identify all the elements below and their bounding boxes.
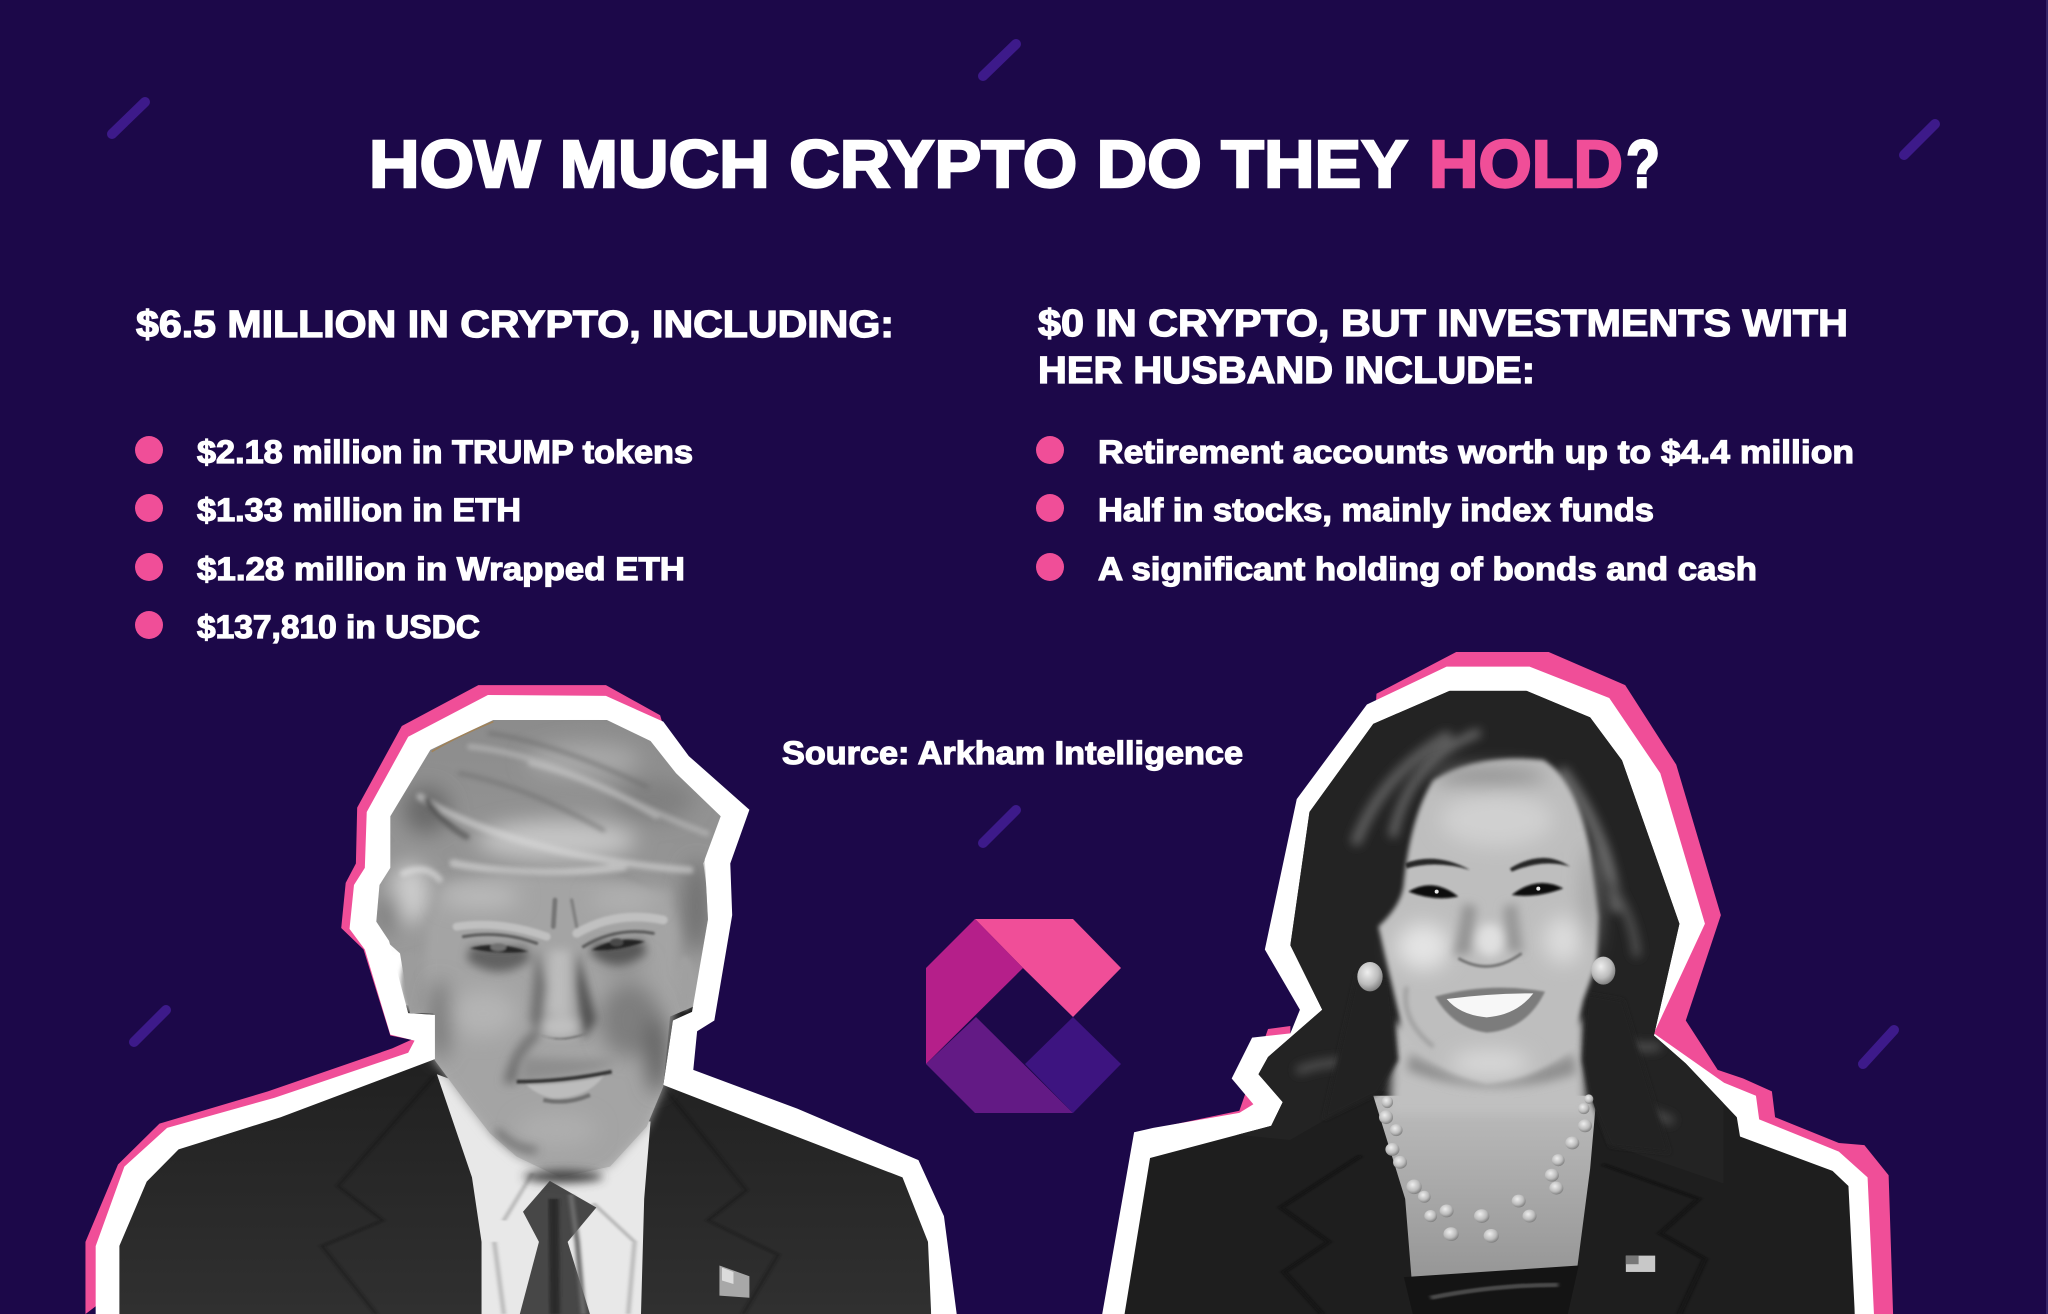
chest (1373, 1096, 1597, 1278)
right edge line (2046, 0, 2048, 1314)
pink outline (1367, 652, 1893, 1314)
decorative dashes (112, 44, 1935, 1064)
portrait: Harris cutout (1102, 652, 1893, 1314)
pink outline (85, 685, 676, 1314)
white outline (96, 695, 957, 1314)
lapels (321, 1176, 779, 1314)
tie (520, 1181, 596, 1314)
shirt and collar (437, 1074, 651, 1314)
catchlights (1435, 887, 1540, 894)
right column heading: HER HUSBAND INCLUDE: (1038, 350, 1535, 392)
neck (1390, 1020, 1587, 1113)
head detail (370, 720, 723, 1183)
right column heading (1038, 303, 1848, 392)
right bullet list: Half in stocks, mainly index funds (1098, 492, 1654, 528)
face (1378, 759, 1598, 1084)
left bullet list: $1.33 million in ETH (197, 492, 521, 528)
face shading (430, 885, 667, 1147)
right column heading: $0 IN CRYPTO, BUT INVESTMENTS WITH (1038, 303, 1848, 345)
collar shadows (494, 1173, 635, 1314)
necklace (1379, 1094, 1593, 1243)
title: ? (1626, 127, 1660, 202)
flag pin (1626, 1256, 1655, 1272)
tie shading (554, 1195, 584, 1314)
hair base (1237, 690, 1724, 1135)
lapels (1281, 1156, 1705, 1314)
right bullet list: Retirement accounts worth up to $4.4 million (1098, 434, 1854, 470)
brows, eyes and nostrils (1405, 858, 1570, 966)
left bullet list (135, 434, 693, 645)
earrings (1357, 957, 1615, 991)
right bullet list (1036, 434, 1854, 587)
hair and head base (370, 720, 723, 1177)
eyes (470, 938, 645, 1039)
black top (1404, 1266, 1579, 1314)
source: Source: Arkham Intelligence (782, 735, 1243, 771)
white outline (1102, 667, 1874, 1314)
upper lip shade (523, 1056, 608, 1079)
hair tone (382, 743, 710, 953)
mouth (517, 1072, 612, 1102)
photo (96, 720, 957, 1314)
hair highlights (1300, 733, 1670, 1120)
left bullet list: $137,810 in USDC (197, 609, 480, 645)
title: HOW MUCH CRYPTO DO THEY (369, 127, 1408, 202)
top sheen (1431, 1285, 1558, 1298)
face (425, 874, 678, 1177)
face shading (1397, 769, 1596, 1077)
icon: logo (926, 919, 1121, 1113)
eye sockets and nose shadow (467, 940, 647, 1183)
head detail (1237, 690, 1724, 1135)
nose (1453, 903, 1523, 957)
portrait: Trump cutout (85, 685, 957, 1314)
pink slivers (1153, 1026, 1290, 1132)
ears (398, 962, 692, 1014)
hair strands (403, 733, 707, 907)
smile (1406, 987, 1545, 1047)
left bullet list: $1.28 million in Wrapped ETH (197, 551, 685, 587)
neck shadow (1407, 1053, 1577, 1088)
left column heading: $6.5 MILLION IN CRYPTO, INCLUDING: (136, 304, 894, 346)
flag pin (719, 1266, 749, 1298)
brows (457, 900, 663, 947)
left bullet list: $2.18 million in TRUMP tokens (197, 434, 693, 470)
hair over neck sides (1334, 1016, 1662, 1126)
title: HOLD (1429, 127, 1623, 202)
right bullet list: A significant holding of bonds and cash (1098, 551, 1757, 587)
photo (1112, 680, 1877, 1314)
brown fringe at top edge (432, 722, 493, 752)
